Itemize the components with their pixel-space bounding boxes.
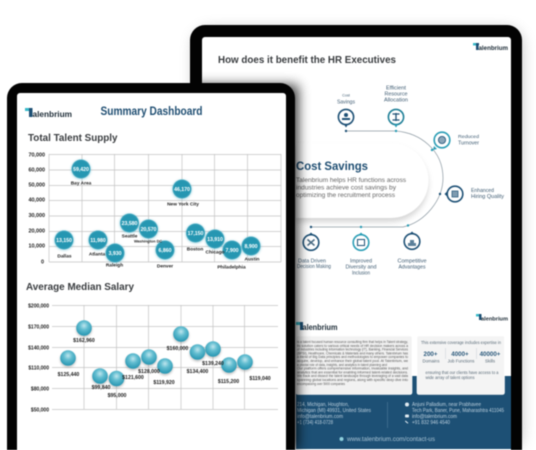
icon: diversity — [353, 232, 369, 250]
heading: HR executives: How does it benefit the HR Executives — [218, 54, 396, 66]
text: India address — [412, 402, 504, 426]
text: contact url: www.talenbrium.com/contact-us — [346, 436, 435, 443]
chart: total talent supply: Atlanta — [89, 252, 105, 258]
caption: reduced turnover — [458, 134, 479, 146]
caption: reduced turnover: Reduced — [458, 134, 479, 140]
text: cost savings description: industries achieve cost savings by — [296, 184, 397, 192]
chart: average median salary: $119,920 — [153, 380, 175, 386]
chart: total talent supply: Philadelphia — [217, 264, 246, 270]
chart: total talent supply: 20,000 — [28, 228, 45, 234]
chart: average median salary: $80,000 — [31, 386, 49, 392]
chart: total talent supply: 23,580 — [122, 221, 138, 227]
card: about: a blend of Big Data principles and methodologies to empower companies to — [297, 354, 408, 359]
chart: total talent supply — [28, 152, 281, 270]
caption: competitive advantage: Competitive — [398, 258, 427, 264]
card: about: We track and dissect the talent landscape through leveraging of a vast data — [297, 373, 409, 378]
text: India address: info@talenbrium.com — [412, 414, 457, 420]
chart: total talent supply: 70,000 — [28, 152, 45, 158]
chart: total talent supply: 59,420 — [73, 167, 89, 173]
text: cost savings description — [296, 177, 406, 199]
chart: total talent supply: Raleigh — [106, 262, 123, 268]
chart: total talent supply: 46,170 — [174, 187, 190, 193]
chart: total talent supply: New York City — [167, 202, 199, 208]
card: about: Our platform offers comprehensive information, invaluable insights, and — [297, 366, 408, 371]
logo: back tablet top: alenbrium — [478, 45, 508, 52]
chart: total talent supply: 3,930 — [109, 251, 122, 257]
text: US address — [297, 402, 371, 426]
chart: total talent supply: Washington DC — [134, 240, 162, 244]
card: about: Its solution caters to various critical needs of HR decision makers across a — [297, 343, 409, 348]
chart: average median salary: $50,000 — [31, 408, 49, 414]
caption: diversity: Inclusion — [352, 270, 370, 276]
text: India address: +91 832 946 4540 — [412, 420, 450, 426]
chart: total talent supply: 13,910 — [207, 237, 223, 243]
caption: diversity: Improved — [350, 258, 372, 264]
chart: total talent supply: Dallas — [57, 254, 72, 260]
logo: footer large: alenbrium — [302, 322, 338, 332]
chart: total talent supply: 50,000 — [28, 182, 45, 188]
logo: front tablet: alenbrium — [32, 109, 72, 119]
caption: reduced turnover: Turnover — [458, 140, 479, 146]
caption: hiring quality — [471, 188, 504, 200]
card: coverage stats: 200+ — [424, 351, 438, 358]
heading: total talent supply: Total Talent Supply — [28, 132, 118, 144]
caption: efficient resource allocation — [384, 86, 408, 104]
caption: cost savings — [337, 94, 355, 106]
text: cost savings description: Talenbrium helps HR functions across — [296, 177, 406, 184]
text: US address: info@talenbrium.com — [297, 414, 343, 420]
heading: average median salary: Average Median Salary — [26, 281, 134, 293]
caption: diversity — [346, 258, 377, 276]
text: India address: Tech Park, Baner, Pune, Maharashtra 411045 — [412, 408, 504, 414]
chart: total talent supply: Boston — [187, 246, 203, 252]
connector path — [310, 130, 443, 228]
caption: data driven: Data Driven — [298, 258, 326, 264]
panel: front tablet — [7, 83, 295, 450]
chart: total talent supply: 8,900 — [245, 244, 258, 250]
icon: cost savings — [338, 109, 354, 128]
panel: back tablet — [186, 22, 530, 450]
chart: average median salary: $110,000 — [28, 366, 49, 372]
chart: total talent supply: Austin — [245, 256, 260, 262]
caption: competitive advantage — [398, 258, 427, 270]
chart: total talent supply: Denver — [157, 264, 173, 270]
card: coverage stats: This extensive coverage includes expertise in — [421, 340, 501, 345]
panel: footer page — [296, 314, 511, 449]
card: coverage stats: Skills — [485, 358, 495, 364]
chart: average median salary: $160,000 — [167, 346, 188, 352]
logo: back tablet top — [473, 43, 508, 52]
icon: data driven — [303, 232, 319, 250]
card: about: analytics that are essential for enabling informed talent-related decisions. — [297, 369, 408, 374]
card: about: a pivotal role of data, insights, and analytics in talent planning and — [297, 362, 387, 367]
icon: hiring quality — [444, 186, 463, 202]
card: coverage stats: ensuring that our clients have access to a — [426, 370, 499, 375]
card: coverage stats: Job Functions — [448, 358, 474, 364]
logo: footer right: alenbrium — [481, 316, 508, 322]
chart: average median salary: $162,960 — [73, 338, 95, 344]
text: US address: 214, Michigan, Houghton, — [297, 402, 349, 408]
front tablet cast shadow — [202, 75, 308, 450]
card: about: (BFSI), Healthcare, Chemicals & Materials and many others. Talenbrium has — [297, 350, 408, 355]
caption: efficient resource allocation: Resource — [384, 92, 408, 98]
chart: average median salary: $170,000 — [28, 324, 49, 330]
card: coverage stats: 4000+ — [451, 351, 469, 358]
card: about: encompassing over 5000 companies — [297, 381, 345, 386]
caption: data driven: Decision Making — [297, 264, 331, 270]
chart: total talent supply: 10,000 — [28, 244, 45, 250]
chart: average median salary: $95,000 — [108, 393, 126, 399]
caption: hiring quality: Hiring Quality — [471, 194, 504, 200]
caption: diversity: Diversity and — [346, 264, 377, 270]
chart: total talent supply: 40,000 — [28, 198, 45, 204]
chart: average median salary: $134,400 — [187, 369, 208, 375]
chart: total talent supply: 30,000 — [28, 213, 45, 219]
chart: total talent supply: Seattle — [122, 234, 138, 240]
icon: reduced turnover — [433, 132, 450, 150]
card: about: of industries including information technology (IT), Banking, Financial Services — [297, 347, 408, 352]
chart: average median salary: $99,840 — [92, 385, 110, 391]
chart: total talent supply: Chicago — [206, 250, 225, 256]
chart: average median salary: $125,440 — [58, 372, 79, 378]
chart: total talent supply: 60,000 — [28, 168, 45, 174]
chart: total talent supply: 13,150 — [56, 238, 72, 244]
chart: average median salary: $128,000 — [138, 369, 160, 375]
chart: average median salary: $115,200 — [218, 379, 239, 385]
card: about: spanning global locations and regions, along with specific deep dive into — [297, 377, 408, 382]
chart: average median salary — [28, 304, 278, 414]
heading: cost savings: Cost Savings — [296, 159, 368, 173]
caption: data driven — [297, 258, 331, 270]
text: US address: +1 (734) 418-0728 — [297, 420, 333, 426]
icon: resource allocation — [388, 109, 404, 128]
card: about: acquire, develop, and enhance their global talent pool. At Talenbrium, we — [297, 358, 408, 363]
card: about: is a talent focused human resource consulting firm that helps in Talent strategy, — [297, 339, 408, 344]
chart: average median salary: $200,000 — [28, 304, 49, 310]
panel: cost savings pill — [296, 143, 429, 222]
caption: cost savings: Savings — [337, 100, 355, 106]
icon: competitive advantage — [404, 232, 420, 249]
title: summary dashboard: Summary Dashboard — [100, 106, 202, 118]
chart: total talent supply: 0 — [41, 260, 44, 266]
caption: competitive advantage: Advantages — [398, 264, 426, 270]
chart: total talent supply: Bay Area — [71, 180, 92, 186]
card: about — [296, 336, 412, 394]
chart: average median salary: $119,040 — [249, 376, 271, 382]
caption: efficient resource allocation: Allocation — [384, 98, 408, 104]
card: coverage stats: Domains — [423, 358, 439, 364]
caption: cost savings: Cost — [342, 94, 351, 98]
caption: hiring quality: Enhanced — [471, 188, 494, 194]
chart: average median salary: $139,240 — [202, 361, 224, 367]
icon: contact icons — [405, 402, 409, 424]
text: cost savings description: optimizing the recruitment process — [296, 192, 395, 199]
text: US address: Michigan (MI) 49931, United States — [297, 408, 371, 414]
chart: average median salary: $140,000 — [28, 346, 49, 352]
caption: efficient resource allocation: Efficient — [386, 86, 407, 92]
chart: total talent supply: 7,900 — [226, 248, 239, 254]
card: coverage stats: wide array of talent options — [426, 375, 474, 380]
chart: total talent supply: 20,570 — [141, 227, 157, 233]
chart: average median salary: $121,600 — [122, 375, 144, 381]
chart: total talent supply: 6,860 — [159, 248, 172, 254]
chart: total talent supply: 17,150 — [188, 231, 204, 237]
logo: footer right — [476, 314, 508, 322]
card: coverage stats — [417, 336, 504, 394]
card: coverage stats: 40000+ — [480, 351, 501, 358]
text: India address: Anjuni Palladium, near Prabhavee — [412, 402, 481, 408]
icon: web bullet — [340, 437, 344, 441]
chart: total talent supply: 11,980 — [90, 238, 106, 244]
